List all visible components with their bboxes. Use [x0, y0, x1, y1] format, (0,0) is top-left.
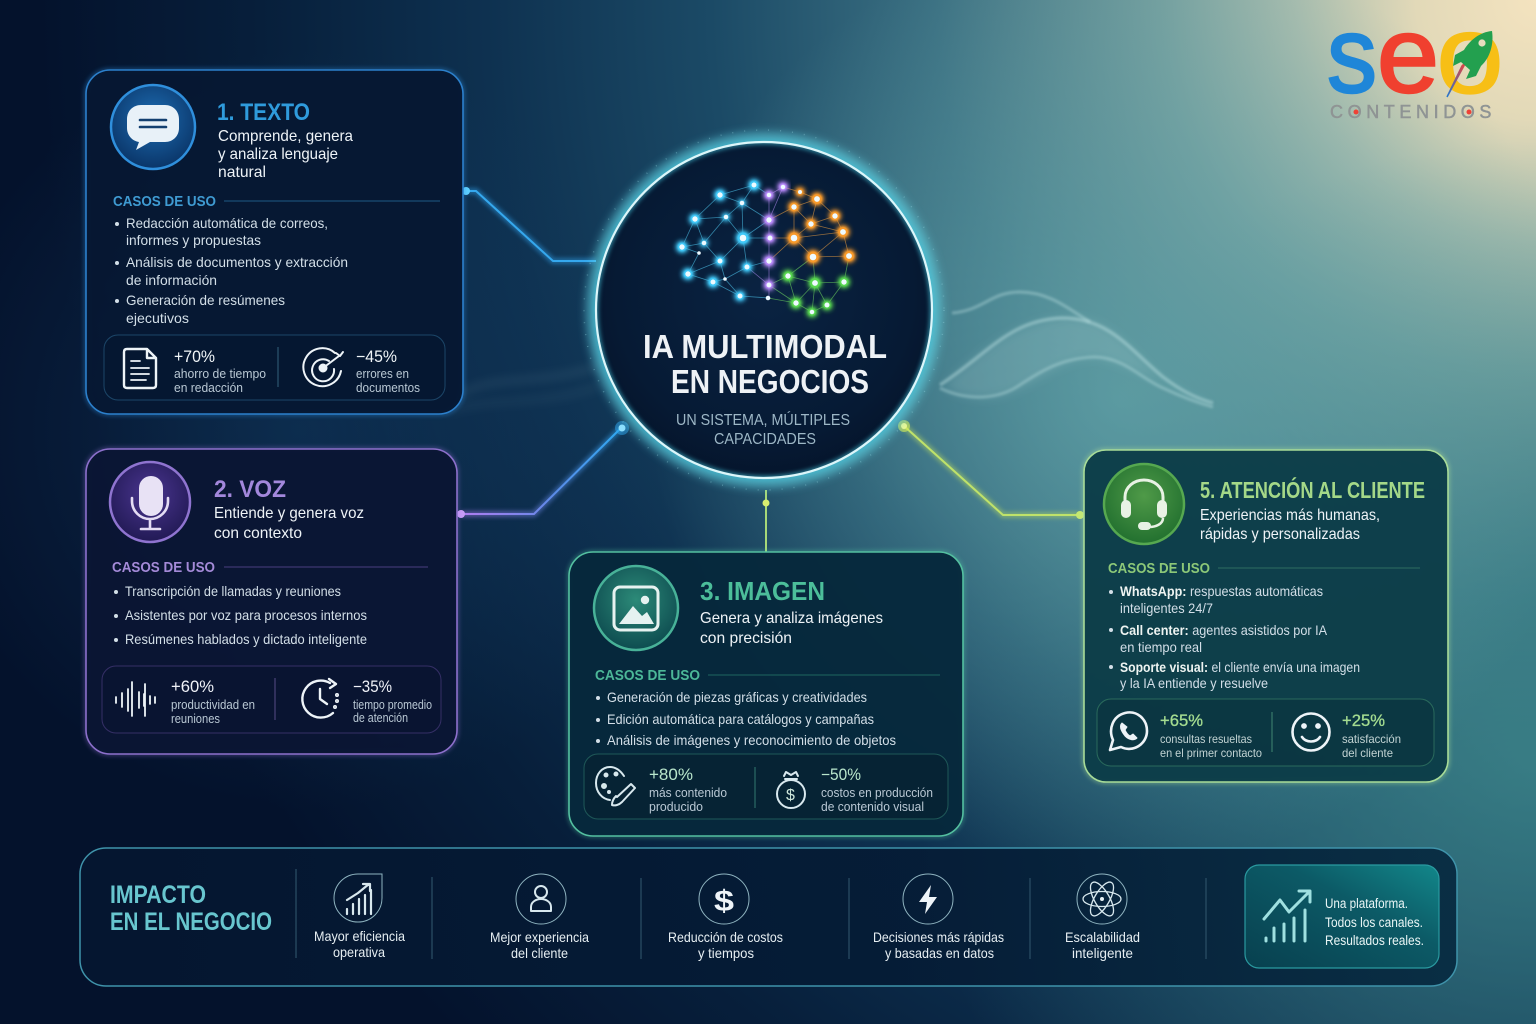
stat: 45	[356, 348, 420, 395]
stat: 65: en el primer contacto	[1160, 746, 1262, 760]
stat: 65: +65%	[1160, 712, 1203, 730]
connector: imagen	[762, 490, 770, 552]
description: y analiza lenguaje	[218, 146, 338, 163]
stat: 25: satisfacción	[1342, 732, 1401, 746]
smoke wisps	[445, 292, 1215, 412]
stat: 80: más contenido	[649, 786, 727, 800]
stat: 50: de contenido visual	[821, 800, 924, 814]
stats box	[584, 754, 948, 819]
stat: 25: del cliente	[1342, 746, 1393, 760]
heading: EN EL NEGOCIO	[110, 908, 272, 936]
stat: 70: en redacción	[174, 381, 243, 395]
item: escalabilidad: Escalabilidad	[1065, 929, 1140, 945]
use case list: Análisis de imágenes y reconocimiento de objetos	[607, 732, 896, 748]
icon: palette	[596, 767, 635, 805]
casos de uso heading: CASOS DE USO	[595, 668, 700, 684]
item: eficiencia: Mayor eficiencia	[314, 928, 405, 944]
stat: 45: documentos	[356, 381, 420, 395]
stat: 60: reuniones	[171, 712, 220, 726]
heading: 5. ATENCIÓN AL CLIENTE	[1200, 476, 1425, 503]
item: eficiencia	[314, 874, 405, 960]
icon: microphone	[110, 462, 190, 542]
panel: impacto en el negocio	[80, 848, 1457, 986]
use case list: Transcripción de llamadas y reuniones	[125, 583, 341, 599]
description: Experiencias más humanas,	[1200, 507, 1380, 524]
icon: picture	[594, 566, 678, 650]
icon: rocket	[1447, 31, 1493, 97]
use case list: informes y propuestas	[126, 232, 261, 248]
central hub	[584, 130, 944, 490]
casos de uso heading: CASOS DE USO	[112, 560, 215, 576]
icon: headset	[1104, 464, 1184, 544]
subtitle: CAPACIDADES	[714, 431, 816, 448]
use case list: Asistentes por voz para procesos internos	[125, 607, 367, 623]
stat: 50: −50%	[821, 766, 861, 784]
description	[700, 610, 883, 647]
stat: 35: de atención	[353, 711, 408, 725]
stat: 45: −45%	[356, 348, 397, 366]
use case list: en tiempo real	[1120, 639, 1202, 655]
use case list	[596, 689, 896, 748]
description	[1200, 507, 1380, 543]
stat: 35: tiempo promedio	[353, 698, 432, 712]
item: costos: Reducción de costos	[668, 929, 783, 945]
use case list	[1109, 583, 1360, 691]
icon: neural brain	[678, 181, 854, 316]
stat: 65	[1160, 712, 1262, 760]
description: natural	[218, 164, 266, 181]
item: experiencia: Mejor experiencia	[490, 929, 589, 945]
icon: money bag	[777, 772, 805, 808]
heading: 3. IMAGEN	[700, 576, 825, 606]
use case list: Resúmenes hablados y dictado inteligente	[125, 631, 367, 647]
description: con precisión	[700, 630, 792, 647]
stat: 45: errores en	[356, 367, 409, 381]
stat: 60: +60%	[171, 678, 214, 696]
stats box	[1097, 699, 1434, 766]
stat: 25	[1342, 712, 1401, 760]
item: costos	[668, 874, 783, 961]
use case list: Generación de resúmenes	[126, 292, 285, 308]
use case list	[114, 583, 367, 647]
icon: growth chart	[1264, 891, 1310, 941]
item: costos: $	[714, 885, 734, 918]
stat: 80: +80%	[649, 766, 693, 784]
use case list: de información	[126, 272, 217, 288]
callout text: Todos los canales.	[1325, 915, 1423, 930]
use case list: Soporte visual: el cliente envía una imagen	[1120, 659, 1360, 675]
icon: waveform	[116, 682, 155, 716]
item: eficiencia: operativa	[333, 944, 385, 960]
logo: SEO Contenidos: CONTENIDOS	[1330, 102, 1496, 122]
description: rápidas y personalizadas	[1200, 526, 1360, 543]
connector: texto	[462, 187, 596, 261]
stat: 50	[821, 766, 933, 814]
stat: 25: +25%	[1342, 712, 1385, 730]
stat: 80	[649, 766, 727, 814]
stats box	[104, 335, 445, 400]
use case list: inteligentes 24/7	[1120, 600, 1213, 616]
description: Genera y analiza imágenes	[700, 610, 883, 627]
item: costos: y tiempos	[698, 945, 754, 961]
stat: 50: costos en producción	[821, 786, 933, 800]
callout text: Una plataforma.	[1325, 896, 1408, 911]
heading: 2. VOZ	[214, 476, 286, 503]
title	[643, 328, 887, 400]
use case list: Edición automática para catálogos y campañas	[607, 711, 874, 727]
use case list: WhatsApp: respuestas automáticas	[1120, 583, 1323, 599]
use case list: Redacción automática de correos,	[126, 215, 328, 231]
stat: 65: consultas resueltas	[1160, 732, 1252, 746]
stat: 60	[171, 678, 255, 726]
icon: clock	[302, 679, 338, 718]
description: Entiende y genera voz	[214, 505, 364, 522]
title: EN NEGOCIOS	[671, 363, 869, 400]
use case list: y la IA entiende y resuelve	[1120, 675, 1268, 691]
use case list: ejecutivos	[126, 310, 189, 326]
logo: SEO Contenidos	[1327, 0, 1504, 122]
item: experiencia: del cliente	[511, 945, 568, 961]
icon: whatsapp	[1110, 712, 1147, 750]
callout text: Resultados reales.	[1325, 933, 1424, 948]
stat: 35	[353, 678, 432, 725]
icon: smile	[1292, 714, 1330, 750]
callout: una plataforma	[1245, 865, 1439, 968]
use case list: Call center: agentes asistidos por IA	[1120, 622, 1328, 638]
connector: voz	[457, 421, 629, 518]
icon: chat bubble	[111, 85, 195, 169]
stat: 80: producido	[649, 800, 703, 814]
use case list: Análisis de documentos y extracción	[126, 254, 348, 270]
icon glyph: dollar: $	[786, 787, 795, 804]
heading	[110, 881, 272, 936]
stat: 70: +70%	[174, 348, 215, 366]
item: experiencia	[490, 874, 589, 961]
casos de uso heading: CASOS DE USO	[113, 194, 216, 210]
subtitle: UN SISTEMA, MÚLTIPLES	[676, 410, 850, 429]
description	[214, 505, 364, 542]
stats box	[102, 666, 441, 733]
panel: 2 voz	[86, 449, 457, 754]
item: decisiones	[873, 874, 1004, 961]
description	[218, 128, 353, 181]
panel: 5 atencion al cliente	[1084, 450, 1448, 782]
icon: target	[303, 348, 343, 386]
subtitle	[676, 410, 850, 448]
stat: 70	[174, 348, 266, 395]
panel: 1 texto	[86, 70, 463, 414]
use case list: Generación de piezas gráficas y creatividades	[607, 689, 867, 705]
use case list	[115, 215, 348, 326]
heading: 1. TEXTO	[217, 99, 310, 126]
description: con contexto	[214, 525, 302, 542]
connector: atencion al cliente	[898, 420, 1084, 519]
stat: 35: −35%	[353, 678, 392, 696]
stat: 70: ahorro de tiempo	[174, 367, 266, 381]
item: decisiones: Decisiones más rápidas	[873, 929, 1004, 945]
description: Comprende, genera	[218, 128, 353, 145]
item: escalabilidad	[1065, 874, 1140, 961]
title: IA MULTIMODAL	[643, 328, 887, 365]
heading: IMPACTO	[110, 881, 206, 909]
callout text	[1325, 896, 1424, 948]
panel: 3 imagen	[569, 552, 963, 836]
item: decisiones: y basadas en datos	[885, 945, 994, 961]
item: escalabilidad: inteligente	[1072, 945, 1133, 961]
stat: 60: productividad en	[171, 698, 255, 712]
icon: document	[124, 349, 156, 388]
casos de uso heading: CASOS DE USO	[1108, 561, 1210, 577]
